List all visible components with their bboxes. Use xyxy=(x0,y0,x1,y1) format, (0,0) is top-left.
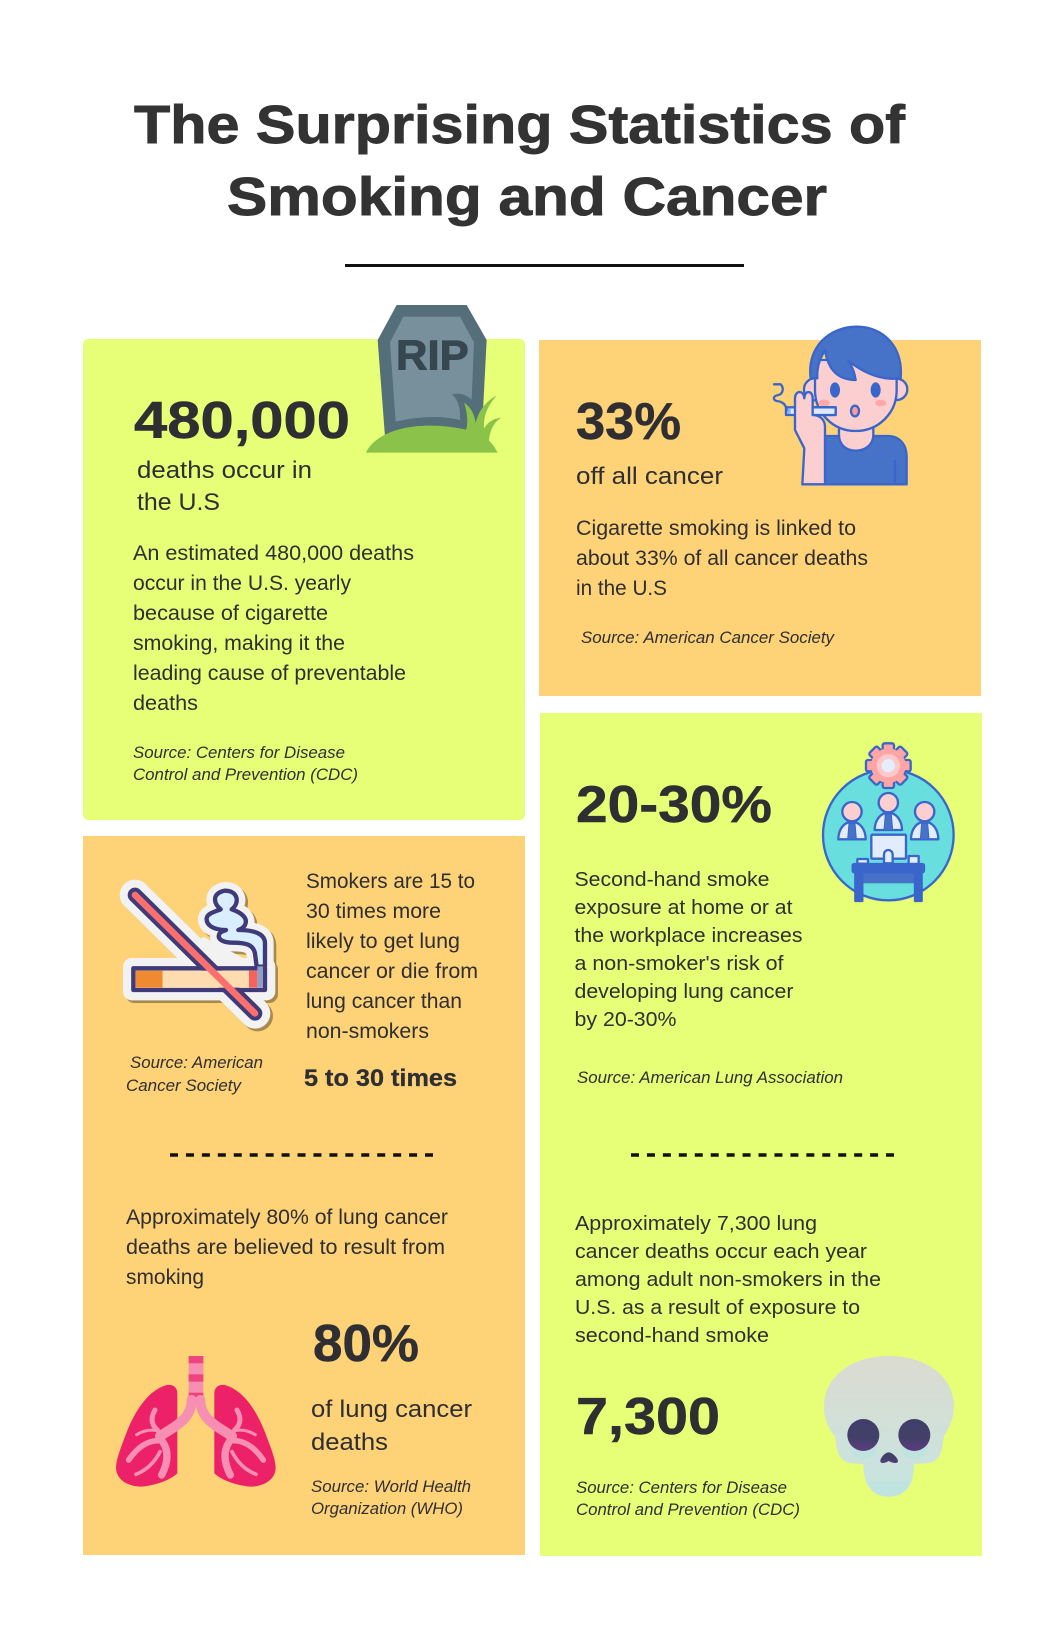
subheading: deaths occur in xyxy=(137,457,312,484)
body text: exposure at home or at xyxy=(574,896,793,919)
dashed divider xyxy=(170,1153,433,1157)
subheading xyxy=(311,1396,472,1456)
source: Source: World Health xyxy=(311,1477,471,1496)
icon: RIP tombstone: RIP xyxy=(396,332,469,379)
subheading: of lung cancer xyxy=(311,1396,472,1423)
source: Control and Prevention (CDC) xyxy=(133,765,358,784)
source xyxy=(576,1478,800,1519)
panel: 33% of all cancer xyxy=(539,327,981,696)
subheading: the U.S xyxy=(137,489,220,516)
stat: 33%: 33% xyxy=(576,393,681,451)
subheading xyxy=(137,457,312,516)
body text: Cigarette smoking is linked to xyxy=(576,517,856,540)
body text: An estimated 480,000 deaths xyxy=(133,542,414,565)
subheading: off all cancer xyxy=(576,463,723,490)
stat: 7,300: 7,300 xyxy=(576,1388,720,1446)
source: Source: American Cancer Society xyxy=(581,628,835,647)
body text: in the U.S xyxy=(576,577,667,600)
source xyxy=(311,1477,471,1518)
title divider xyxy=(345,264,744,267)
title xyxy=(134,95,906,227)
body text: deaths are believed to result from xyxy=(126,1236,445,1259)
source: Source: Centers for Disease xyxy=(576,1478,787,1497)
dashed divider xyxy=(631,1153,894,1157)
panel: 480,000 deaths xyxy=(83,305,525,820)
body text xyxy=(126,1206,448,1289)
source xyxy=(126,1053,263,1095)
body text: deaths xyxy=(133,692,198,715)
source: Source: American Lung Association xyxy=(577,1068,843,1087)
source: Organization (WHO) xyxy=(311,1499,463,1518)
stat: 20-30%: 20-30% xyxy=(576,776,772,834)
stat: 5 to 30 times: 5 to 30 times xyxy=(304,1065,457,1092)
body text: occur in the U.S. yearly xyxy=(133,572,351,595)
panel: second-hand smoke xyxy=(540,713,982,1556)
body text: non-smokers xyxy=(306,1020,429,1043)
body text: second-hand smoke xyxy=(575,1324,769,1347)
body text: by 20-30% xyxy=(574,1008,676,1031)
icon: no smoking sticker xyxy=(132,891,269,1016)
body text xyxy=(133,542,414,715)
body text: cancer deaths occur each year xyxy=(575,1240,867,1263)
source: Control and Prevention (CDC) xyxy=(576,1500,800,1519)
body text: lung cancer than xyxy=(306,990,462,1013)
body text xyxy=(576,517,868,600)
panel: lung cancer risk and 80% xyxy=(83,836,525,1555)
body text: smoking xyxy=(126,1266,204,1289)
source: Cancer Society xyxy=(126,1076,242,1095)
body text: Approximately 80% of lung cancer xyxy=(126,1206,448,1229)
source: Source: Centers for Disease xyxy=(133,743,345,762)
body text: smoking, making it the xyxy=(133,632,345,655)
icon: office team with gear xyxy=(823,743,954,901)
body text: likely to get lung xyxy=(306,930,460,953)
body text xyxy=(306,870,478,1043)
body text: 30 times more xyxy=(306,900,441,923)
body text: Second-hand smoke xyxy=(574,868,770,891)
icon: RIP tombstone xyxy=(366,305,502,453)
body text: because of cigarette xyxy=(133,602,328,625)
body text: Approximately 7,300 lung xyxy=(575,1212,817,1235)
icon: skull xyxy=(824,1356,954,1497)
body text xyxy=(575,1212,881,1347)
subheading: deaths xyxy=(311,1429,388,1456)
title: Smoking and Cancer xyxy=(227,167,827,227)
body text: about 33% of all cancer deaths xyxy=(576,547,868,570)
body text: cancer or die from xyxy=(306,960,478,983)
icon: lungs xyxy=(116,1356,276,1487)
body text xyxy=(574,868,802,1031)
body text: leading cause of preventable xyxy=(133,662,406,685)
body text: U.S. as a result of exposure to xyxy=(575,1296,860,1319)
body text: the workplace increases xyxy=(574,924,802,947)
stat: 80%: 80% xyxy=(313,1315,419,1373)
body text: among adult non-smokers in the xyxy=(575,1268,881,1291)
icon: person smoking xyxy=(774,327,907,484)
source: Source: American xyxy=(130,1053,263,1072)
body text: a non-smoker's risk of xyxy=(574,952,784,975)
stat: 480,000: 480,000 xyxy=(134,392,350,450)
body text: developing lung cancer xyxy=(574,980,794,1003)
title: The Surprising Statistics of xyxy=(134,95,906,155)
body text: Smokers are 15 to xyxy=(306,870,475,893)
source xyxy=(133,743,358,784)
